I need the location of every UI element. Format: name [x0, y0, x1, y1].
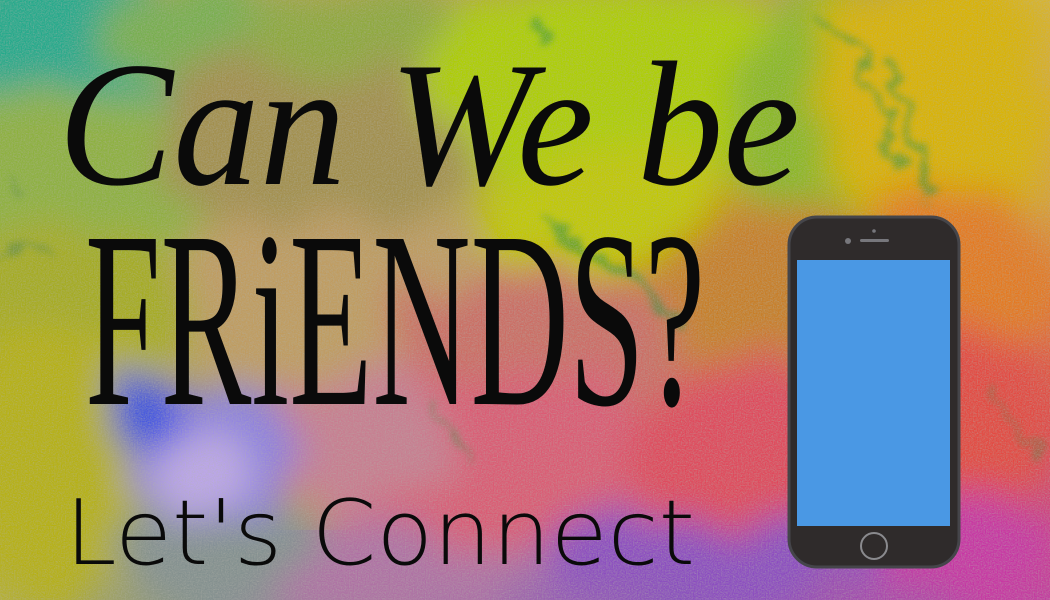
phone sensor — [872, 229, 876, 233]
heading: Can We be: Can We be — [58, 25, 800, 223]
phone body — [789, 217, 959, 567]
icon: smartphone — [789, 217, 959, 567]
subheading: Let's Connect: Let's Connect — [65, 481, 695, 586]
phone home button — [861, 533, 887, 559]
phone camera — [845, 238, 851, 244]
phone screen — [797, 260, 950, 526]
phone speaker — [860, 239, 889, 242]
